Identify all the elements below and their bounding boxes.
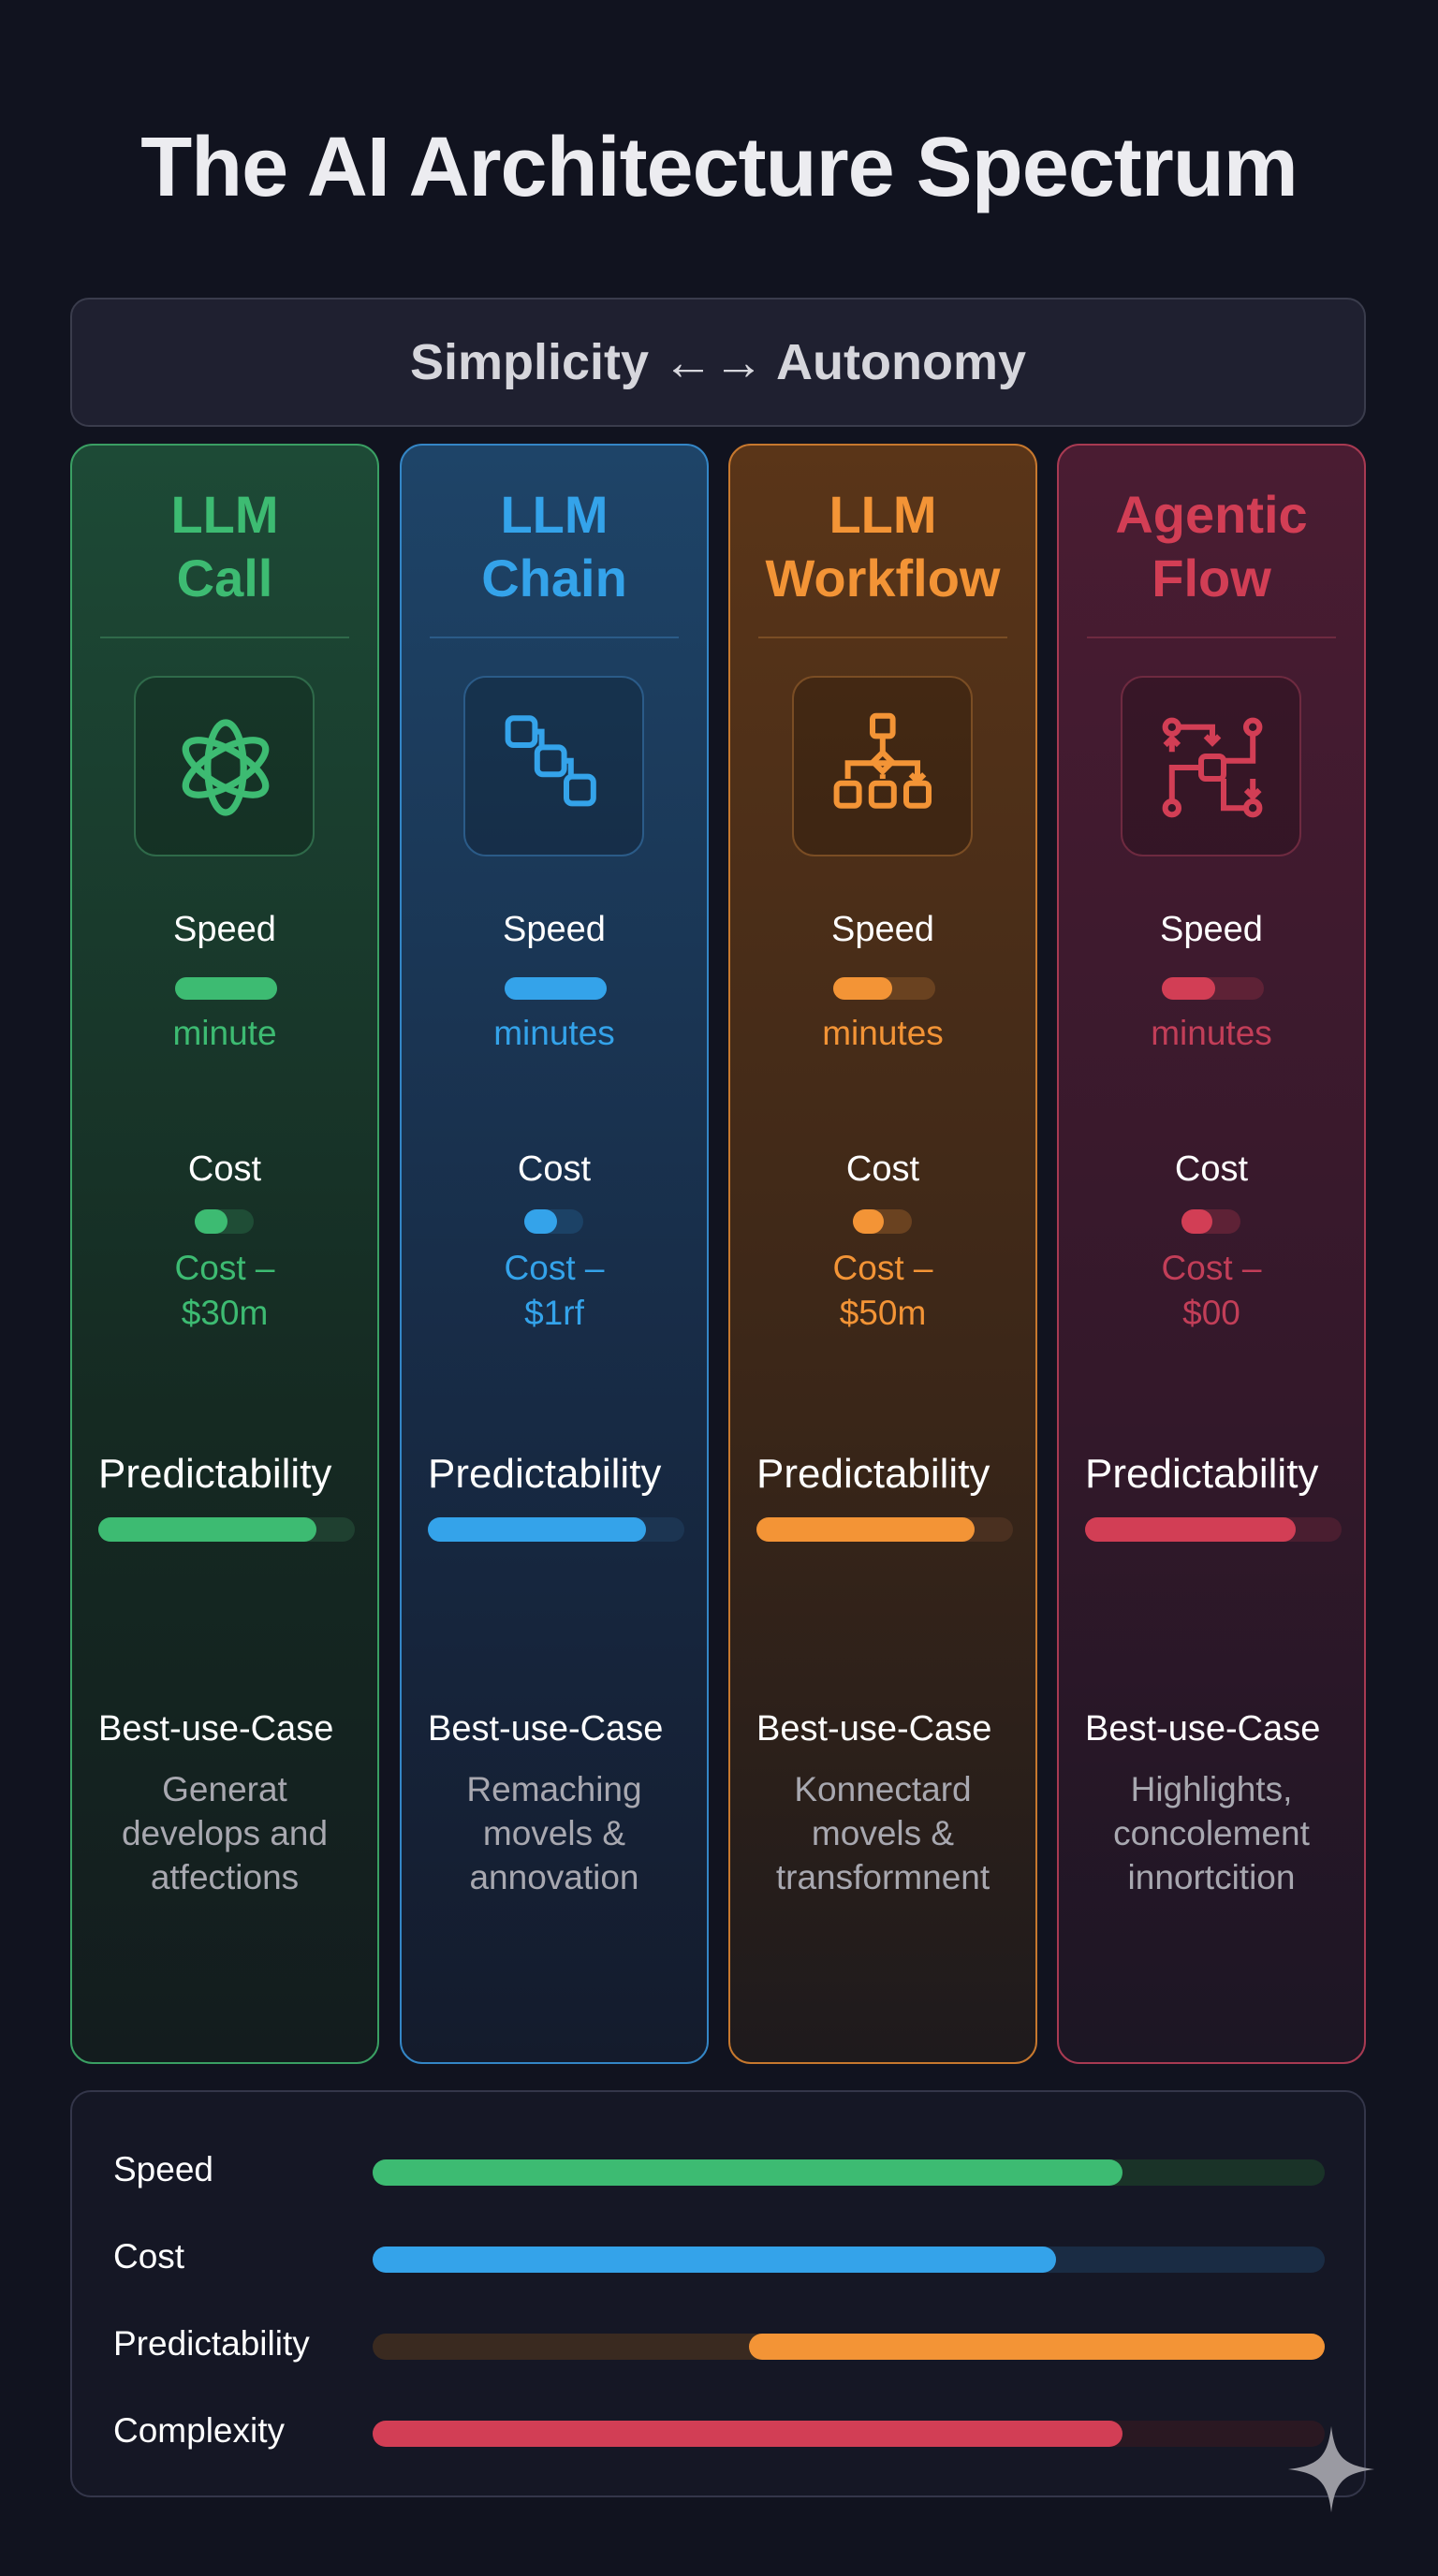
panel: LLM Workflow: Best-use-Case: [756, 1709, 991, 1749]
cost bar: [195, 1209, 254, 1234]
speed bar: [175, 977, 277, 1000]
panel: LLM Call: atfections: [151, 1858, 299, 1896]
panel: LLM Workflow: Cost: [846, 1149, 919, 1189]
panel: LLM Workflow: [728, 444, 1037, 2064]
panel: LLM Workflow: $50m: [840, 1294, 926, 1332]
panel: LLM Workflow: Predictability: [756, 1451, 990, 1497]
speed bar: [1162, 977, 1264, 1000]
panel: Agentic Flow: Best-use-Case: [1085, 1709, 1320, 1749]
panel: LLM Workflow: movels &: [812, 1814, 954, 1852]
panel: Agentic Flow: $00: [1182, 1294, 1240, 1332]
panel: LLM Chain: Cost: [518, 1149, 591, 1189]
row: cost: Cost: [113, 2237, 184, 2276]
panel: LLM Chain: $1rf: [524, 1294, 584, 1332]
panel: Agentic Flow: concolement: [1113, 1814, 1310, 1852]
panel: LLM Workflow: Konnectard: [794, 1770, 972, 1808]
panel: LLM Workflow: transformnent: [776, 1858, 990, 1896]
icon: sparkle: [1288, 2426, 1374, 2512]
heading: LLM: [500, 485, 609, 544]
panel: LLM Chain: Predictability: [428, 1451, 661, 1497]
panel: LLM Call: $30m: [182, 1294, 268, 1332]
panel: LLM Chain: movels &: [483, 1814, 625, 1852]
panel: LLM Call: Predictability: [98, 1451, 331, 1497]
panel: LLM Call: minute: [172, 1014, 277, 1052]
heading: Chain: [481, 549, 627, 607]
cost bar: [853, 1209, 912, 1234]
heading: [1115, 485, 1308, 607]
panel: LLM Chain: Best-use-Case: [428, 1709, 663, 1749]
panel: LLM Call: develops and: [122, 1814, 328, 1852]
heading: LLM: [829, 485, 937, 544]
predictability bar: [98, 1517, 355, 1542]
heading: [481, 485, 627, 607]
panel: LLM Call: Best-use-Case: [98, 1709, 333, 1749]
panel: Agentic Flow: Cost –: [1162, 1249, 1261, 1287]
panel: LLM Chain: annovation: [469, 1858, 639, 1896]
cost bar: [1181, 1209, 1240, 1234]
heading: [766, 485, 1000, 607]
panel: Agentic Flow: Predictability: [1085, 1451, 1318, 1497]
panel: Agentic Flow: Cost: [1175, 1149, 1248, 1189]
row: speed: Speed: [113, 2150, 213, 2188]
heading: LLM: [170, 485, 279, 544]
panel: LLM Call: [70, 444, 379, 2064]
heading: Flow: [1152, 549, 1271, 607]
title: The AI Architecture Spectrum: [140, 121, 1298, 214]
icon: knot: [134, 676, 315, 856]
icon: chain squares: [463, 676, 644, 856]
subtitle banner: Simplicity ←→ Autonomy: [410, 334, 1026, 390]
panel: LLM Call: Cost: [188, 1149, 261, 1189]
row: complexity: Complexity: [113, 2411, 285, 2450]
speed bar: [833, 977, 935, 1000]
speed bar: [505, 977, 607, 1000]
predictability bar: [756, 1517, 1013, 1542]
panel: Agentic Flow: minutes: [1151, 1014, 1272, 1052]
heading: Agentic: [1115, 485, 1308, 544]
row: predictability: Predictability: [113, 2324, 310, 2363]
subtitle banner: [70, 298, 1366, 427]
panel: LLM Call: Speed: [173, 910, 276, 949]
icon: agentic loop: [1121, 676, 1301, 856]
panel: Agentic Flow: innortcition: [1128, 1858, 1295, 1896]
panel: Agentic Flow: Speed: [1160, 910, 1263, 949]
panel: LLM Workflow: Speed: [831, 910, 934, 949]
heading: [170, 485, 279, 607]
panel: LLM Chain: Remaching: [466, 1770, 642, 1808]
panel: LLM Chain: minutes: [493, 1014, 615, 1052]
heading: Workflow: [766, 549, 1000, 607]
icon: workflow tree: [792, 676, 973, 856]
predictability bar: [1085, 1517, 1342, 1542]
panel: LLM Call: Generat: [162, 1770, 287, 1808]
panel: Agentic Flow: Highlights,: [1131, 1770, 1292, 1808]
heading: Call: [177, 549, 272, 607]
predictability bar: [428, 1517, 684, 1542]
panel: LLM Chain: Speed: [503, 910, 606, 949]
panel: LLM Workflow: Cost –: [833, 1249, 932, 1287]
cost bar: [524, 1209, 583, 1234]
panel: Agentic Flow: [1057, 444, 1366, 2064]
panel: LLM Call: Cost –: [175, 1249, 274, 1287]
panel: LLM Workflow: minutes: [822, 1014, 944, 1052]
panel: summary bars: [70, 2090, 1366, 2497]
panel: LLM Chain: Cost –: [505, 1249, 604, 1287]
panel: LLM Chain: [400, 444, 709, 2064]
